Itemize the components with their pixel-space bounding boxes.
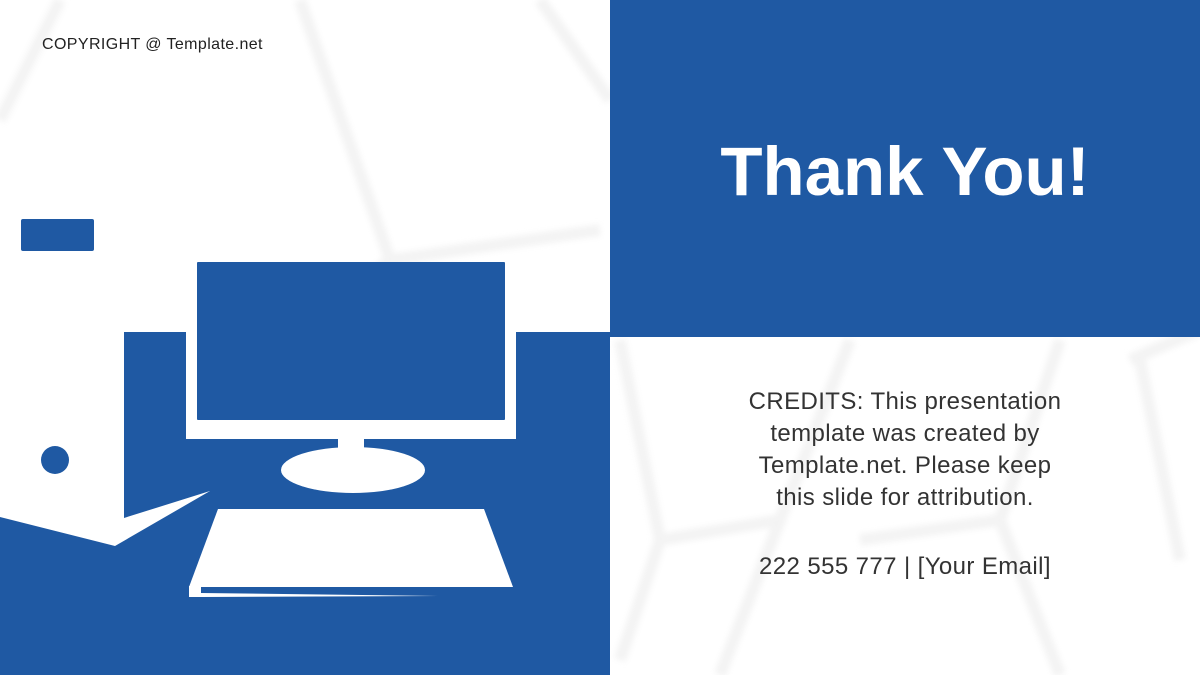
panel: title block (610, 0, 1200, 337)
credits text: template was created by (770, 420, 1040, 447)
credits text (749, 388, 1061, 511)
tower drive slot (21, 219, 94, 251)
credits text: CREDITS: This presentation (749, 388, 1061, 415)
contact line: 222 555 777 | [Your Email] (759, 553, 1051, 580)
title: Thank You! (720, 133, 1090, 210)
blue desk background (0, 332, 610, 675)
illustration: desktop computer (0, 219, 610, 675)
monitor (186, 262, 516, 493)
copyright text: COPYRIGHT @ Template.net (42, 36, 263, 53)
credits text: this slide for attribution. (776, 484, 1034, 511)
credits text: Template.net. Please keep (759, 452, 1051, 479)
keyboard (189, 509, 513, 597)
tower power button (41, 446, 69, 474)
